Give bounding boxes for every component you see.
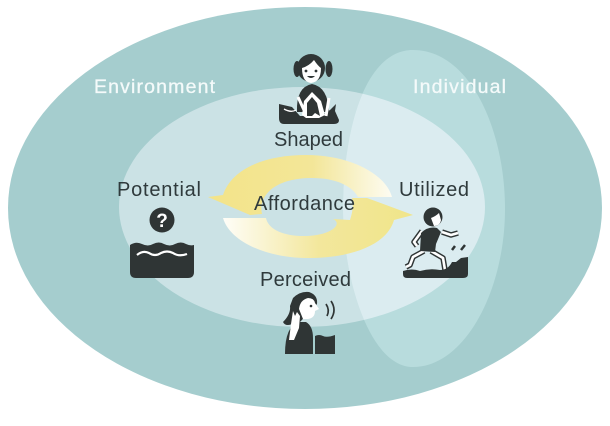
icon: water tank (130, 242, 194, 278)
limbs (406, 231, 458, 270)
individual ellipse (343, 50, 505, 367)
icon: girl listening to water (283, 292, 335, 354)
label: Affordance: Affordance (254, 193, 355, 215)
label: Shaped: Shaped (274, 129, 343, 151)
heading: Environment: Environment (94, 76, 216, 98)
label: Utilized: Utilized (399, 179, 469, 201)
arrow: upper cycle arrow (208, 155, 392, 215)
label: Perceived: Perceived (260, 269, 351, 291)
label: Potential: Potential (117, 179, 201, 201)
icon: running child splashing (403, 208, 468, 278)
inner ellipse: affordance field (119, 87, 485, 327)
overlap of individual and field (343, 94, 485, 320)
arrow: lower cycle arrow (223, 198, 413, 258)
icon: question mark (150, 208, 174, 232)
heading: Individual: Individual (413, 76, 506, 98)
icon: girl shaping sand (279, 54, 339, 124)
icon: question mark: ? (156, 211, 168, 232)
